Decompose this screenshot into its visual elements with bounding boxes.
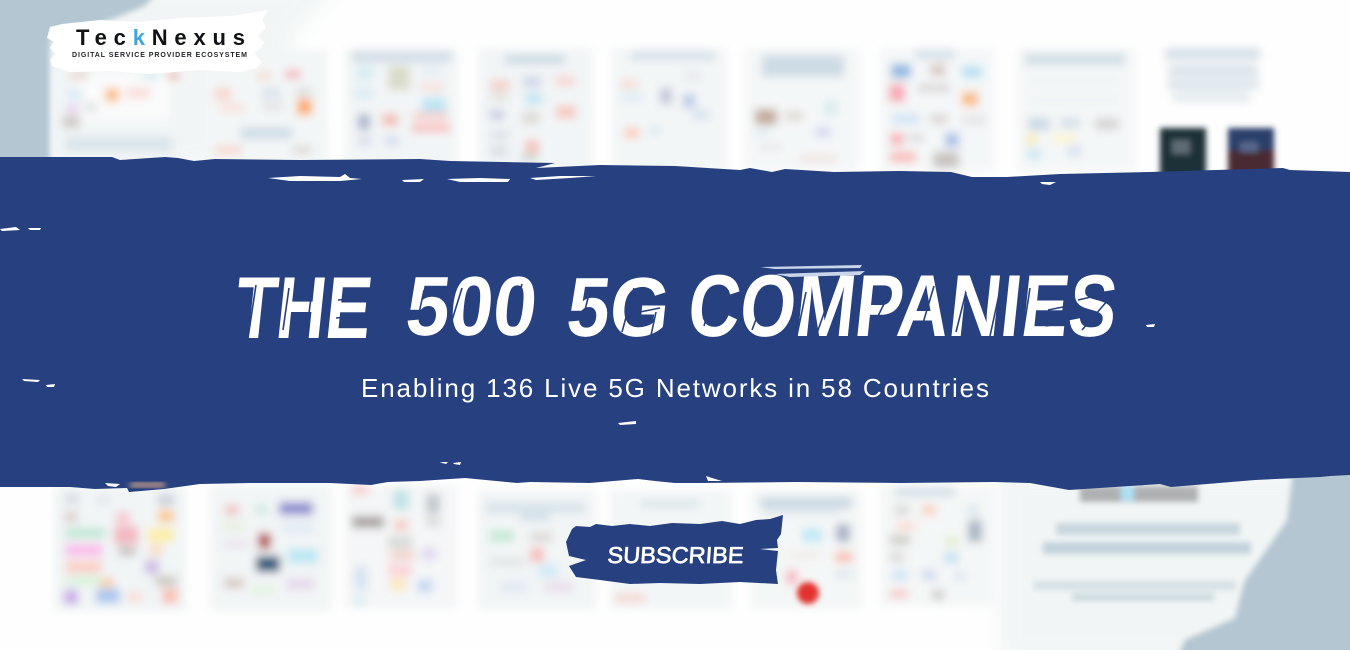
map corner bottom right xyxy=(1172,470,1350,650)
blurred company block, bottom right xyxy=(1034,485,1251,601)
off-white map area top left xyxy=(40,0,345,170)
white brush flecks on band xyxy=(0,174,1155,487)
logo tagline: DIGITAL SERVICE PROVIDER ECOSYSTEM xyxy=(72,52,247,59)
blurred report panels, bottom row xyxy=(54,485,995,611)
map corner top left xyxy=(0,0,168,170)
subscribe button xyxy=(566,515,783,584)
headline: 500 xyxy=(402,259,542,353)
headline: 5G xyxy=(563,260,675,354)
logo wordmark: Tec k Nexus xyxy=(76,25,245,50)
logo xyxy=(47,10,268,74)
headline: COMPANIES xyxy=(684,256,1122,355)
blurred report panels, top row xyxy=(55,48,1260,172)
button label: SUBSCRIBE xyxy=(607,542,744,568)
blue title band xyxy=(0,157,1350,492)
off-white map area bottom right xyxy=(1000,470,1310,650)
blurred red seal xyxy=(797,582,819,604)
brush streak above headline xyxy=(760,265,865,277)
headline xyxy=(230,256,1122,357)
blurred book covers xyxy=(1160,128,1274,178)
logo white brush patch xyxy=(47,10,268,74)
headline brush texture xyxy=(248,284,1108,340)
orange smudge at band edge xyxy=(130,483,165,487)
headline: THE xyxy=(230,258,377,357)
subtitle: Enabling 136 Live 5G Networks in 58 Countries xyxy=(361,373,989,403)
button brush shape xyxy=(566,515,783,584)
